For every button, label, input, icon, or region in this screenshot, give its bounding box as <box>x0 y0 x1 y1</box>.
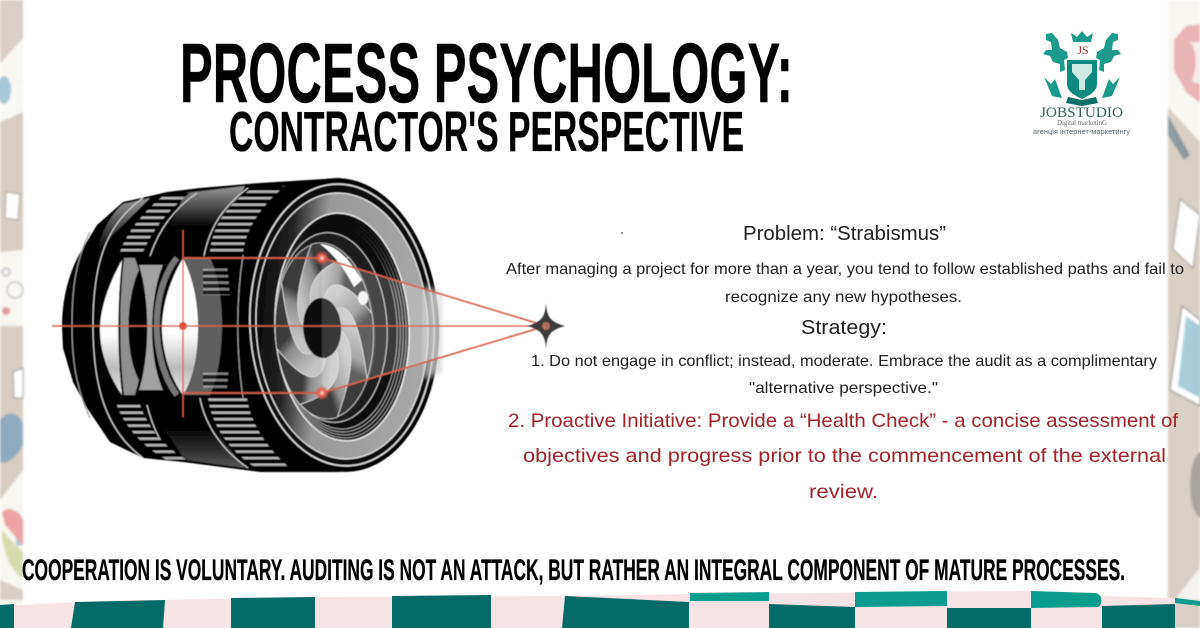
strategy point 1 line 1: 1. Do not engage in conflict; instead, moderate. Embrace the audit as a complimentary <box>531 353 1157 370</box>
lens element 2 <box>120 258 139 395</box>
lens element 3 <box>139 265 163 390</box>
logo tagline: Digital marketinG <box>1057 119 1107 127</box>
barrel highlight lines <box>72 188 248 468</box>
icon: right horse <box>1096 33 1121 72</box>
glass reflection stripes <box>203 268 237 295</box>
subtitle: CONTRACTOR'S PERSPECTIVE <box>229 100 744 164</box>
left decorative strip <box>0 0 23 628</box>
logo tagline ukrainian: агенція інтернет-маркетингу <box>1033 128 1131 136</box>
icon: right leaves <box>1102 77 1120 98</box>
rim fade highlight <box>424 285 442 380</box>
glass dark center <box>226 258 250 395</box>
lens barrel silhouette <box>62 178 340 472</box>
iris backing <box>273 240 380 421</box>
right decorative strip <box>1168 0 1200 628</box>
ribbon <box>1066 97 1098 106</box>
ray focus dots <box>315 251 329 265</box>
logo initials: JS <box>1077 43 1089 57</box>
rear knurled ring bottom <box>117 405 187 460</box>
front of lens <box>235 173 447 477</box>
strategy heading: Strategy: <box>801 317 887 339</box>
light beam overlay <box>322 258 546 393</box>
front grey ring <box>249 189 435 463</box>
strategy point 2 line 3: review. <box>809 481 878 503</box>
logo: Jobstudio <box>1033 31 1131 136</box>
strategy point 1 line 2: "alternative perspective." <box>749 380 938 397</box>
text block: problem <box>506 223 1184 306</box>
inner ring <box>270 230 392 425</box>
problem text line 1: After managing a project for more than a year, you tend to follow established paths and fail to <box>506 261 1184 278</box>
lens element 4 <box>162 258 198 395</box>
problem text line 2: recognize any new hypotheses. <box>725 289 962 306</box>
icon: shield <box>1067 60 1097 99</box>
lens element 1 <box>100 260 122 395</box>
icon: crown <box>1071 31 1093 42</box>
text block: strategy <box>508 317 1179 503</box>
title: PROCESS PSYCHOLOGY: <box>180 26 793 120</box>
icon: left horse <box>1043 33 1068 72</box>
icon: funnel chart <box>1072 64 1092 90</box>
rear cap highlight <box>98 198 150 250</box>
glass highlight <box>358 291 368 305</box>
checkered bottom band <box>0 591 1200 628</box>
pupil <box>302 297 343 359</box>
red ray lines <box>52 230 546 417</box>
logo name: JOBSTUDIO <box>1040 105 1123 121</box>
translucent glass panel <box>183 258 222 395</box>
front knurled ring bottom <box>208 398 292 470</box>
front rim outer <box>235 173 447 477</box>
mid band bottom highlight <box>165 430 245 468</box>
front knurled ring top <box>210 186 285 253</box>
mid band top highlight <box>170 186 245 226</box>
ribbed inner barrel <box>270 213 412 441</box>
strategy point 2 line 2: objectives and progress prior to the commencement of the external <box>523 445 1166 467</box>
rear knurled ring top <box>120 193 190 252</box>
strategy point 2 line 1: 2. Proactive Initiative: Provide a “Health Check” - a concise assessment of <box>508 410 1179 432</box>
tiny dot mark <box>621 232 623 234</box>
iris blades <box>265 230 384 431</box>
lens element 4 rim <box>157 258 177 395</box>
problem heading: Problem: “Strabismus” <box>743 223 946 245</box>
icon: left leaves <box>1044 77 1062 98</box>
camera lens illustration <box>52 173 565 477</box>
white iris highlight <box>320 244 362 287</box>
lens interior <box>269 210 415 444</box>
focal star <box>527 303 565 349</box>
